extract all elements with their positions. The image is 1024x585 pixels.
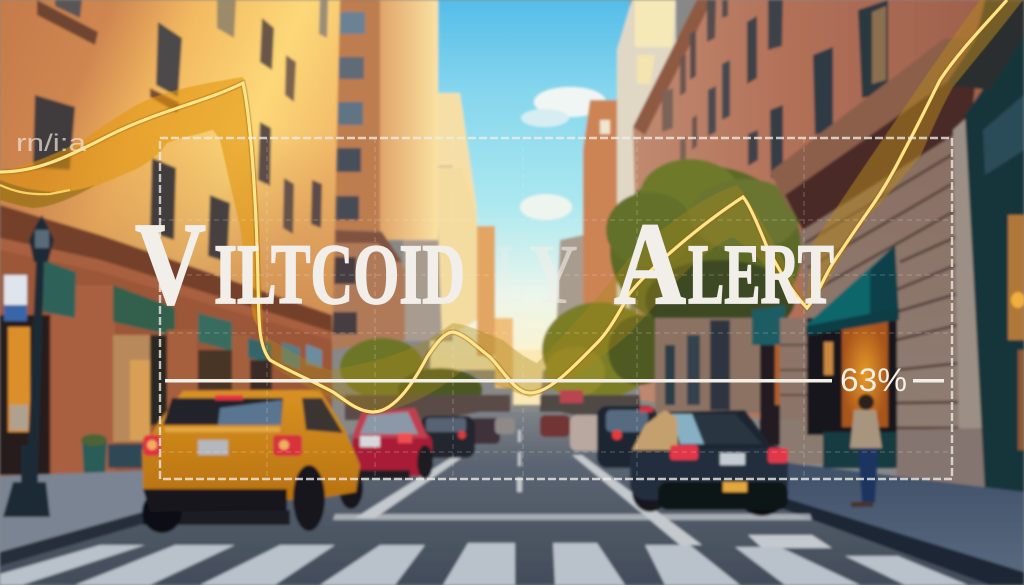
red car [352, 408, 433, 479]
ribbon band: centre sag [263, 185, 806, 414]
title [135, 198, 834, 329]
title: LERT [688, 226, 834, 322]
main volatility line [0, 0, 1007, 412]
volatility line ribbon chart [0, 0, 1023, 414]
main line shadow [0, 0, 1007, 412]
pedestrian [850, 394, 882, 507]
right teal shopfront [945, 0, 1024, 500]
title: Y [529, 226, 578, 322]
ribbon band: right [806, 0, 1023, 310]
left storefronts [0, 205, 332, 477]
left brick building [0, 0, 340, 345]
far cars [420, 406, 657, 468]
lamp post [3, 215, 54, 517]
secondary line [0, 185, 70, 194]
percentage value: 63% [840, 362, 907, 398]
ribbon band: olive underlayer left [0, 180, 95, 208]
small chart label: rn/i:a [16, 130, 87, 157]
mid-left tall building [330, 0, 438, 350]
right storefront [655, 245, 899, 468]
title: L [497, 226, 525, 322]
distant trees and horizon [340, 338, 640, 420]
baseline rule left of value [165, 379, 832, 382]
dark car right [630, 410, 788, 516]
title: A [614, 198, 686, 329]
ribbon band: upper left [0, 77, 263, 335]
tree right [542, 159, 802, 398]
distant buildings centre [403, 0, 676, 405]
yellow taxi [142, 390, 363, 533]
title: V [135, 198, 206, 329]
dashed chart frame [160, 138, 952, 479]
crosswalk [0, 543, 968, 585]
road and sidewalks [0, 412, 1024, 585]
title: ILTCOID [214, 226, 465, 322]
road markings [333, 430, 832, 548]
right cornice and stone wall [770, 38, 988, 490]
sky [430, 0, 630, 370]
right brick building [633, 0, 1024, 460]
baseline rule right of value [913, 379, 944, 382]
